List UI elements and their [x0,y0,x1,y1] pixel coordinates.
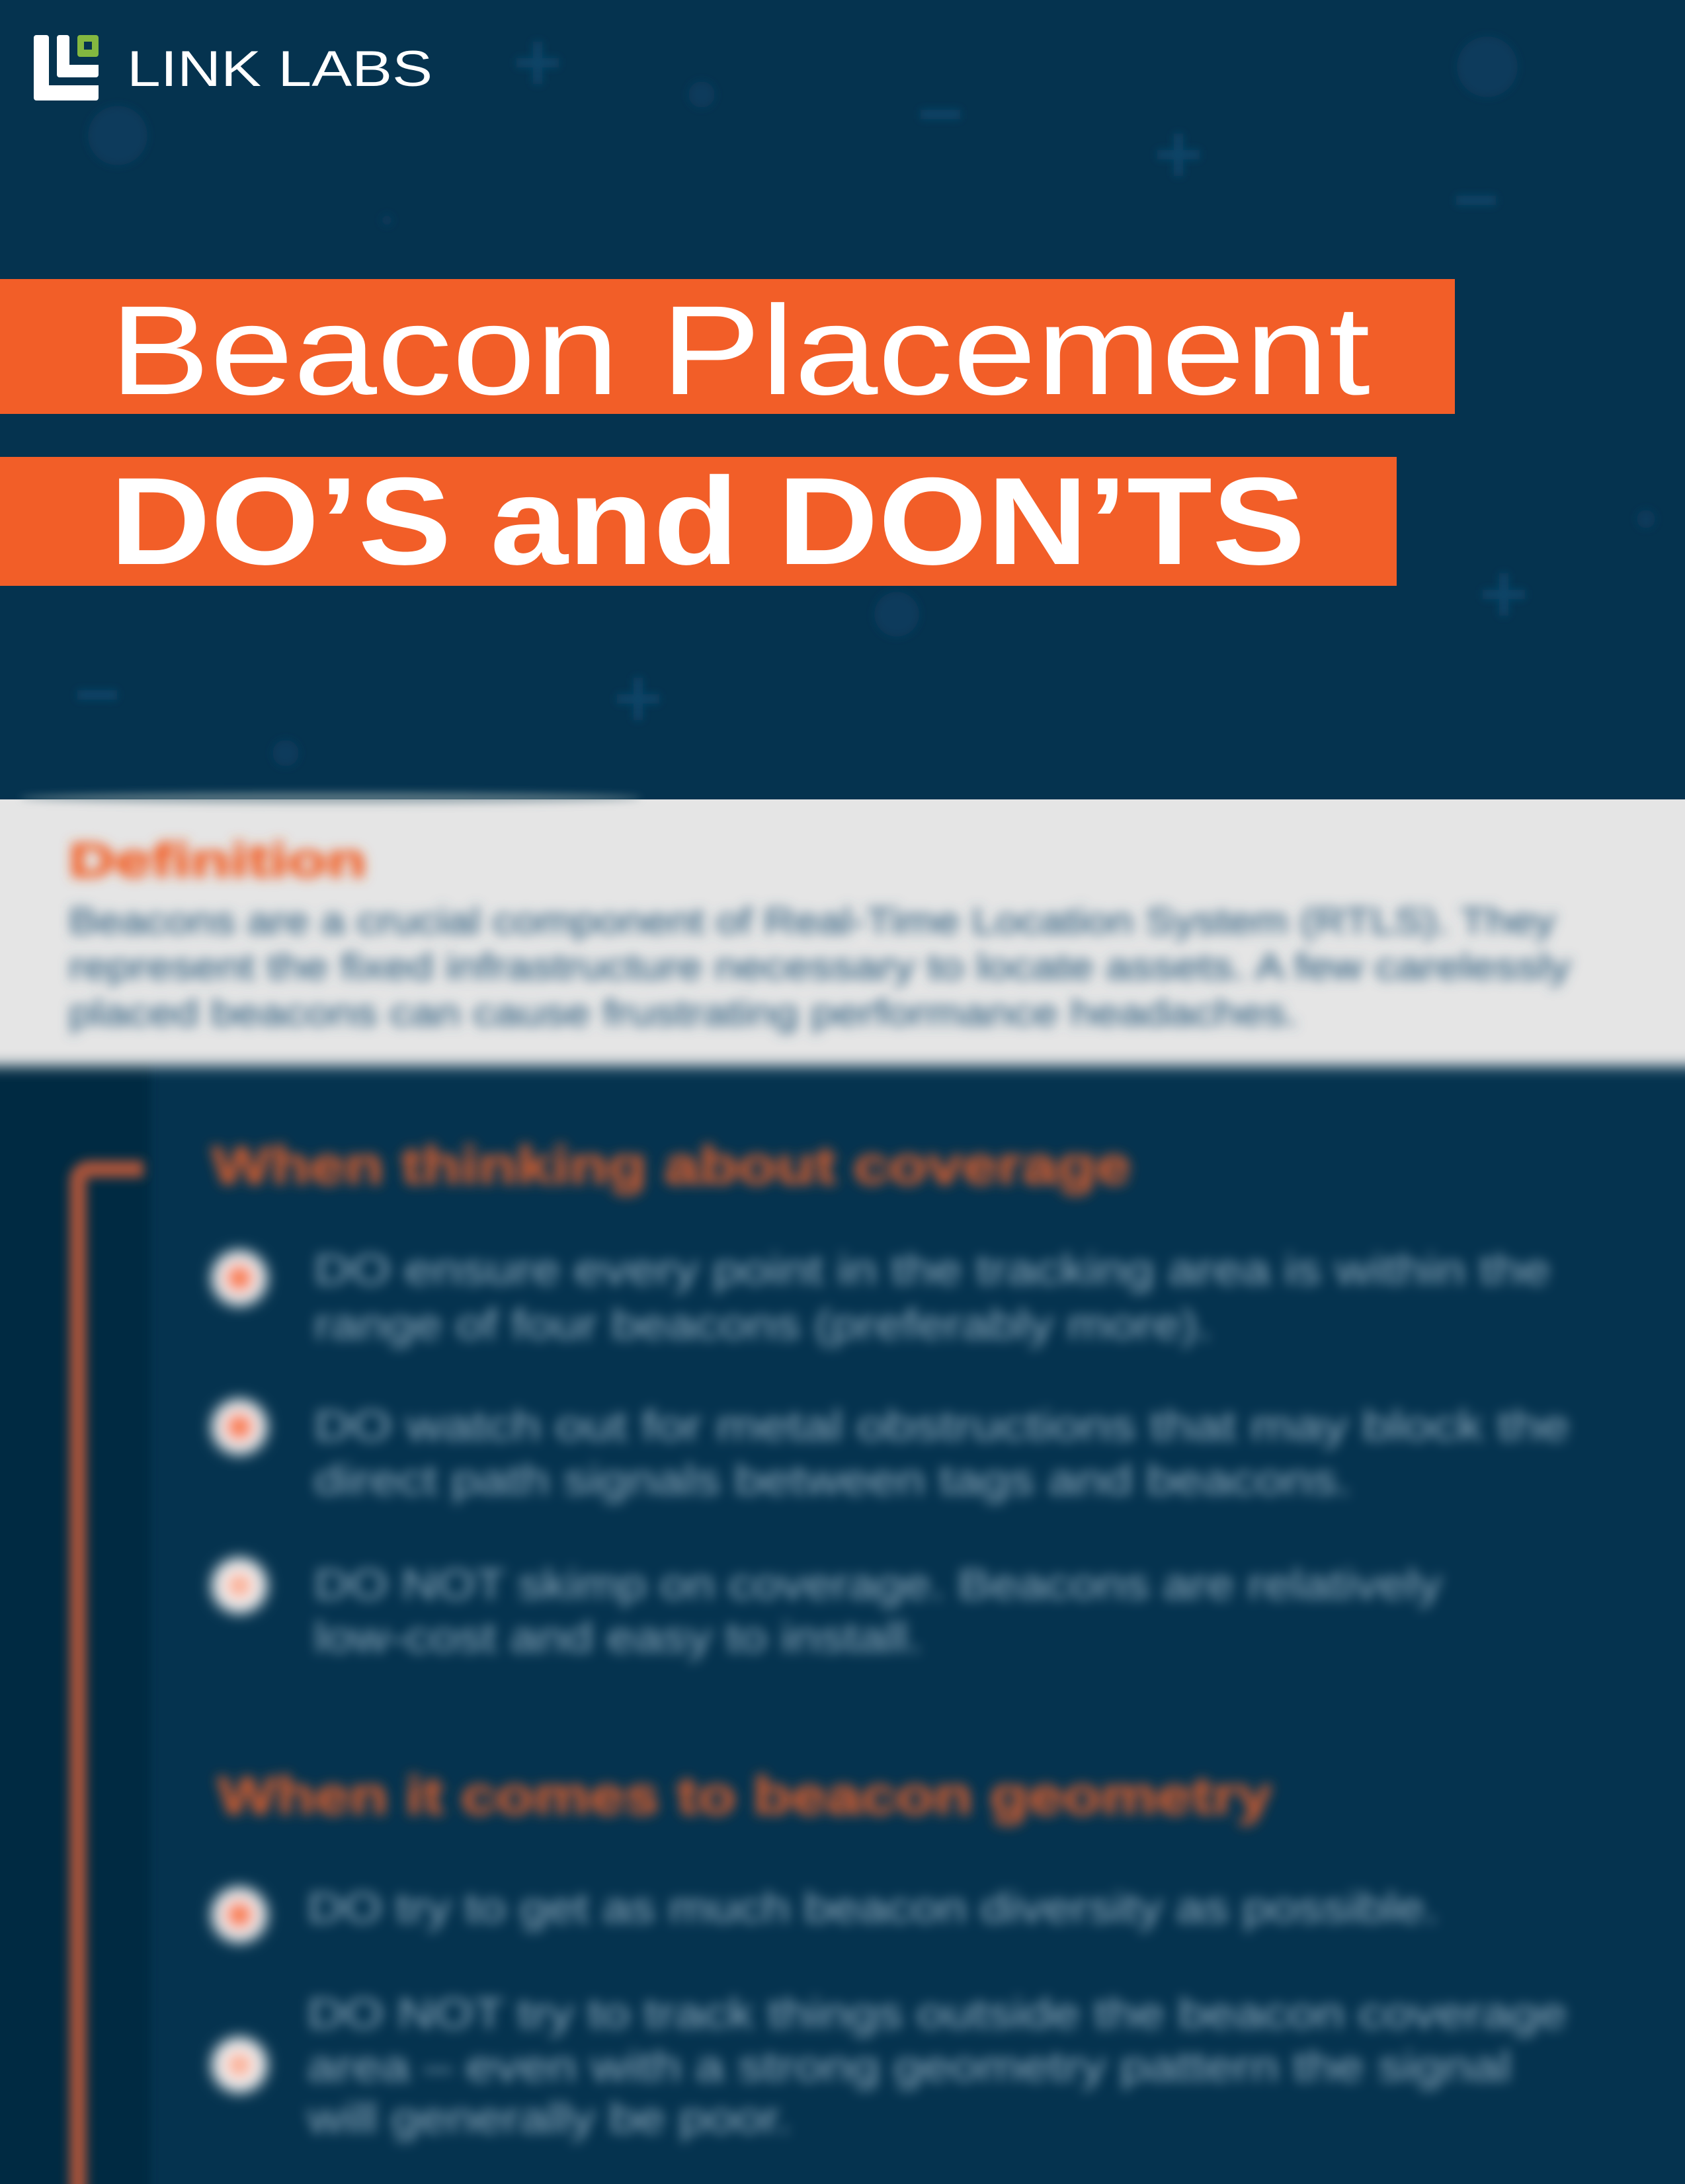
text: do not 2: area – even with a strong geometry pattern the signal [308,2042,1511,2090]
panel: definition [0,792,1685,1066]
text: do 2: direct path signals between tags and beacons. [314,1456,1351,1504]
background pattern: pluses, minuses and circles [77,36,1655,766]
bullet: do not 2 [212,2037,267,2093]
text: do 2 [314,1402,1569,1504]
logo mark [34,35,99,101]
bullet: do not 1 [212,1558,267,1613]
panel background [0,792,1685,1066]
bullet: do 2 [212,1399,267,1455]
section heading: geometry: When it comes to beacon geometry [218,1766,1272,1825]
timeline bracket [78,1169,144,2184]
text: do not 2 [307,1990,1567,2142]
text: do not 1 [314,1560,1442,1661]
logo wordmark: LINK LABS [127,41,432,97]
section heading: coverage: When thinking about coverage [212,1136,1131,1195]
section: coverage [212,1136,1569,1661]
text: do 3: DO try to get as much beacon diversity as possible. [308,1884,1438,1931]
text: do not 1: DO NOT skimp on coverage. Beacons are relatively [314,1560,1442,1608]
bullet: do 1 [212,1250,267,1306]
definition text: placed beacons can cause frustrating performance headaches. [69,992,1298,1033]
definition text: represent the fixed infrastructure necessary to locate assets. A few carelessly [69,946,1571,987]
title banner: Beacon Placement: Beacon Placement [110,279,1370,421]
definition heading: Definition [69,834,366,887]
text: do 2: DO watch out for metal obstructions that may block the [314,1402,1569,1449]
text: do 1 [314,1246,1550,1348]
left sidebar strip [0,1058,151,2184]
definition text: Beacons are a crucial component of Real-Time Location System (RTLS). They [69,900,1555,942]
text: do 1: DO ensure every point in the tracking area is within the [314,1246,1550,1293]
text: do not 2: DO NOT try to track things outside the beacon coverage [308,1990,1567,2037]
title banner: DO'S and DON'TS: DO’S and DON’TS [110,452,1305,590]
text: do 1: range of four beacons (preferably more). [314,1301,1212,1348]
text: do not 1: low-cost and easy to install. [314,1613,922,1661]
logo: Link Labs [34,35,432,101]
section: beacon geometry [212,1766,1567,2142]
bullet: do 3 [212,1887,267,1943]
text: do not 2: will generally be poor. [307,2094,791,2142]
definition text [69,900,1571,1033]
